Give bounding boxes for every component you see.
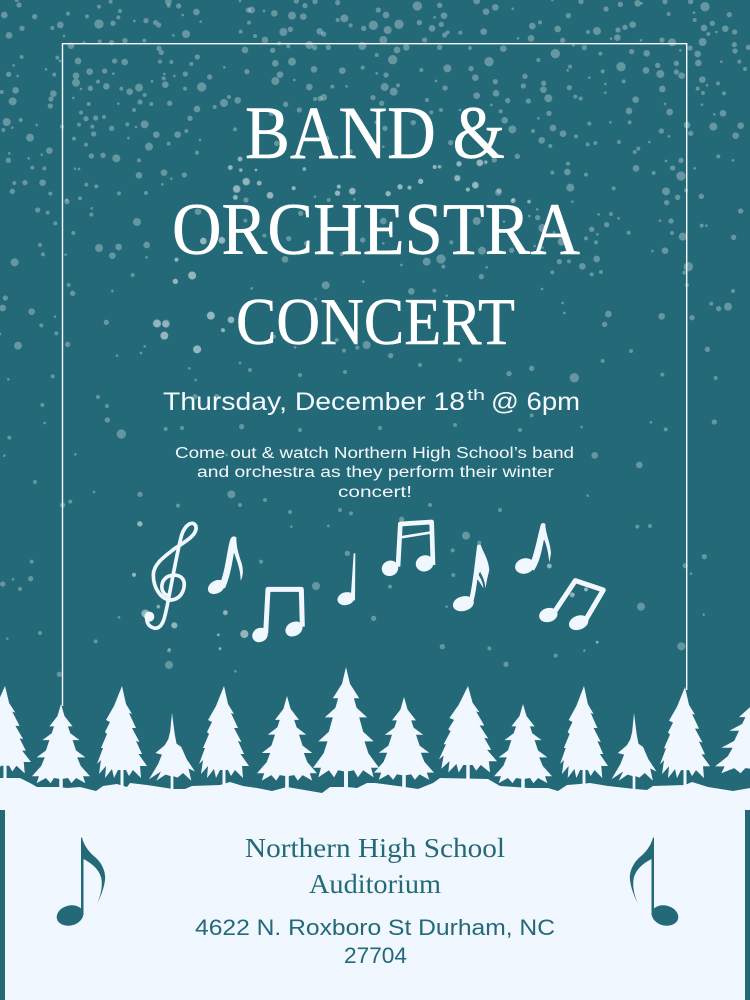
title: CONCERT bbox=[236, 285, 515, 359]
tree 10 bbox=[494, 704, 552, 790]
icon: sixteenth note bbox=[451, 545, 489, 614]
tree 7 bbox=[313, 667, 379, 787]
date line: @ 6pm bbox=[491, 388, 580, 416]
snow ground bbox=[0, 778, 750, 1000]
tree 9 bbox=[439, 686, 497, 780]
venue name: Northern High School bbox=[245, 833, 505, 863]
icon: treble clef bbox=[144, 523, 196, 628]
icon: quarter note bbox=[336, 553, 356, 607]
icon: bottom left note bbox=[54, 838, 105, 929]
description: and orchestra as they perform their winter bbox=[197, 464, 554, 481]
address: 27704 bbox=[344, 943, 407, 968]
music notes row bbox=[144, 522, 603, 645]
frame bbox=[62, 44, 687, 706]
tree 5 bbox=[199, 686, 249, 786]
tree 8 bbox=[374, 697, 434, 787]
icon: eighth note right bbox=[513, 523, 551, 576]
date line: th bbox=[467, 388, 485, 404]
description: concert! bbox=[338, 484, 412, 501]
title: BAND & bbox=[245, 92, 505, 175]
title: ORCHESTRA bbox=[172, 189, 580, 271]
tree 13 bbox=[660, 687, 710, 786]
icon: bottom right note bbox=[630, 838, 681, 929]
venue name: Auditorium bbox=[309, 869, 441, 899]
description bbox=[175, 445, 574, 501]
tree 2 bbox=[32, 704, 90, 790]
tree 4 bbox=[149, 713, 195, 790]
tree 6 bbox=[257, 696, 317, 788]
description: Come out & watch Northern High School’s band bbox=[175, 445, 574, 462]
title bbox=[172, 92, 580, 359]
icon: eighth note bbox=[205, 536, 243, 597]
icon: slanted beamed notes bbox=[538, 581, 603, 633]
tree 11 bbox=[560, 686, 608, 786]
snow dots bbox=[0, 0, 748, 674]
tree line bbox=[0, 667, 750, 790]
date line: Thursday, December 18 bbox=[163, 388, 465, 416]
icon: beamed notes bbox=[250, 589, 305, 645]
address: 4622 N. Roxboro St Durham, NC bbox=[195, 915, 555, 940]
icon: beamed notes with double beam bbox=[379, 522, 436, 579]
venue name bbox=[245, 833, 505, 899]
side strip right bbox=[745, 810, 750, 1000]
tree 1 bbox=[0, 686, 31, 781]
date line bbox=[163, 388, 580, 416]
tree 14 bbox=[715, 695, 750, 780]
address bbox=[195, 915, 555, 968]
side strip left bbox=[0, 810, 5, 1000]
tree 3 bbox=[97, 686, 147, 786]
tree 12 bbox=[612, 713, 656, 790]
